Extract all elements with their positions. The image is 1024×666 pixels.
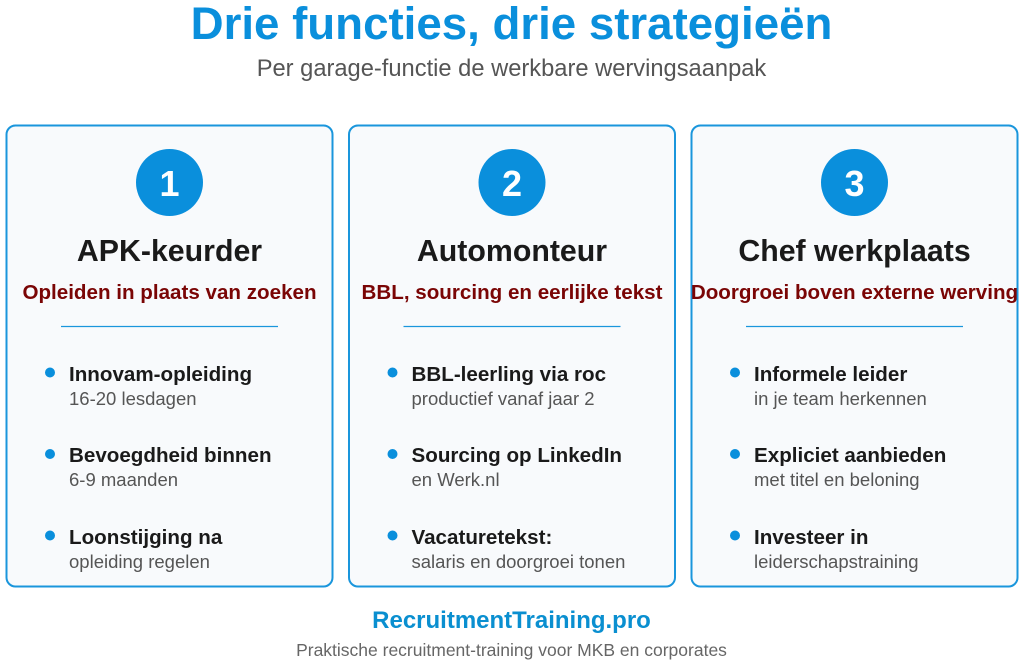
bullet: Bevoegdheid binnen: Bevoegdheid binnen <box>69 444 272 467</box>
panel: Chef werkplaats <box>691 126 1018 586</box>
footer tagline: Praktische recruitment-training voor MKB en corporates <box>296 640 727 660</box>
bullet: Vacaturetekst: Vacaturetekst: <box>412 526 552 549</box>
bullet: Investeer in: Investeer in <box>754 526 868 549</box>
bullet: Informele leider: Informele leider <box>754 363 907 386</box>
card background <box>349 126 675 586</box>
number badge 3 <box>821 149 888 216</box>
bullet: Investeer in <box>730 526 919 572</box>
panel: APK-keurder <box>6 126 332 586</box>
bullet: Expliciet aanbieden: Expliciet aanbieden <box>754 444 946 467</box>
bullet: Sourcing op LinkedIn: en Werk.nl <box>412 469 500 490</box>
bullet: Expliciet aanbieden: met titel en beloning <box>754 469 920 490</box>
bullet: Innovam-opleiding <box>45 363 252 409</box>
bullet: Loonstijging na: Loonstijging na <box>69 526 223 549</box>
bullet: Informele leider <box>730 363 927 409</box>
panel: Automonteur <box>349 126 675 586</box>
number badge 1 <box>136 149 203 216</box>
panel heading: APK-keurder <box>77 235 262 268</box>
bullet: Sourcing op LinkedIn <box>388 444 622 490</box>
bullet: BBL-leerling via roc <box>388 363 606 409</box>
panel heading: Chef werkplaats <box>738 235 971 268</box>
bullet: Innovam-opleiding: Innovam-opleiding <box>69 363 252 386</box>
card background <box>692 126 1018 586</box>
number badge 2 <box>478 149 546 216</box>
bullet: Loonstijging na <box>45 526 223 572</box>
bullet: Expliciet aanbieden <box>730 444 946 490</box>
footer brand: RecruitmentTraining.pro <box>372 607 651 634</box>
bullet: Informele leider: in je team herkennen <box>754 388 927 409</box>
bullet: BBL-leerling via roc: productief vanaf jaar 2 <box>412 388 595 409</box>
strategy subtitle: Doorgroei boven externe werving <box>691 281 1018 304</box>
panel heading: Automonteur <box>417 235 607 268</box>
bullet: BBL-leerling via roc: BBL-leerling via roc <box>412 363 606 386</box>
number badge 1: 1 <box>159 163 180 204</box>
strategy subtitle: Opleiden in plaats van zoeken <box>22 281 317 304</box>
bullet: Loonstijging na: opleiding regelen <box>69 551 210 572</box>
bullet: Bevoegdheid binnen <box>45 444 272 490</box>
subtitle: Per garage-functie de werkbare wervingsaanpak <box>257 56 766 82</box>
bullet: Bevoegdheid binnen: 6-9 maanden <box>69 469 178 490</box>
bullet: Vacaturetekst <box>388 526 625 572</box>
bullet: Vacaturetekst: salaris en doorgroei tonen <box>412 551 625 572</box>
bullet: Sourcing op LinkedIn: Sourcing op LinkedIn <box>412 444 622 467</box>
strategy subtitle: BBL, sourcing en eerlijke tekst <box>362 281 663 304</box>
bullet: Investeer in: leiderschapstraining <box>754 551 919 572</box>
number badge 3: 3 <box>844 163 865 204</box>
bullet: Innovam-opleiding: 16-20 lesdagen <box>69 388 197 409</box>
number badge 2: 2 <box>502 163 522 204</box>
card background <box>6 126 332 586</box>
